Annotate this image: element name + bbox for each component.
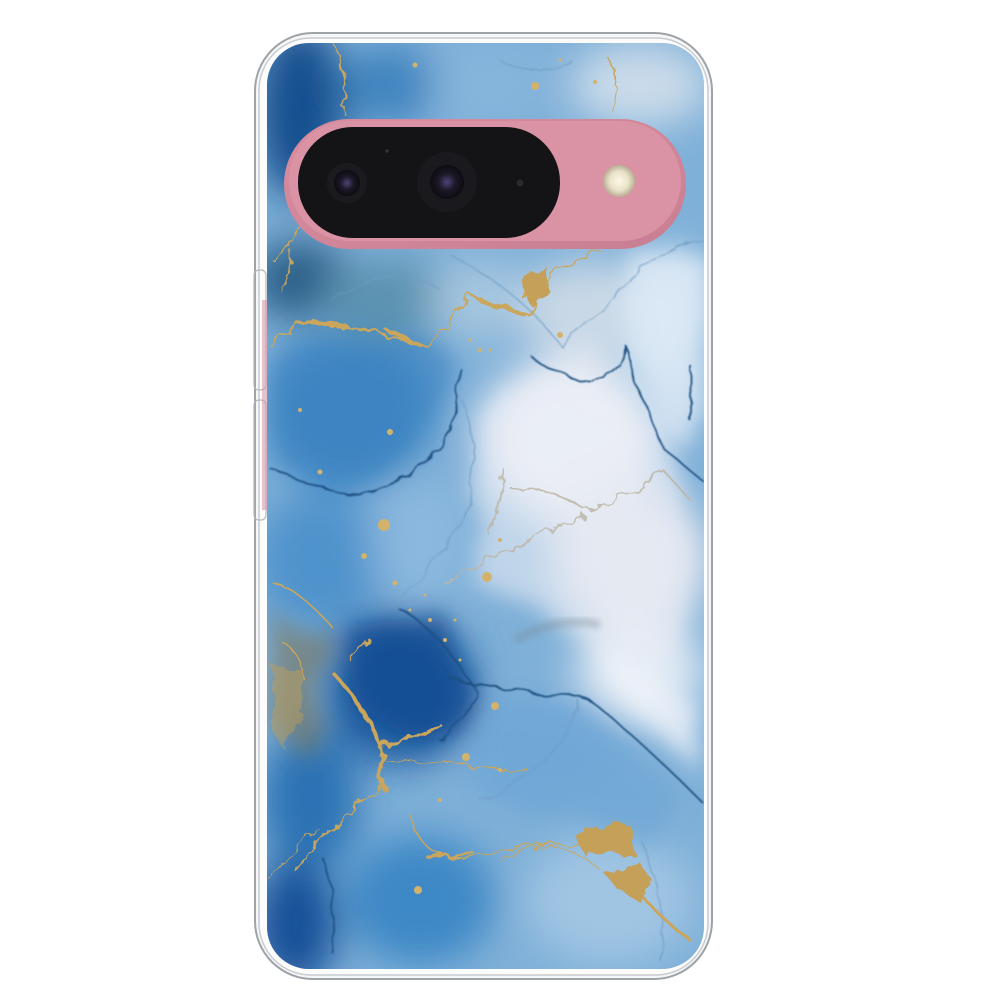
icon: sensor dots (385, 149, 524, 186)
soft colour fields (250, 20, 710, 990)
black lens window (298, 127, 560, 238)
side buttons on case (254, 270, 267, 520)
dark and light washes (270, 250, 700, 840)
icon: flash (603, 165, 635, 197)
clear case shell (255, 33, 712, 979)
gold veins (270, 45, 690, 940)
phone case product illustration (253, 32, 713, 980)
camera bar (284, 119, 686, 249)
icon: main camera lens (417, 152, 477, 212)
icon: left camera lens (327, 163, 367, 203)
gold splatter (298, 58, 597, 894)
gold patches (272, 265, 652, 902)
ink edges (272, 60, 702, 960)
grey veins (445, 470, 690, 585)
pink camera bar housing (284, 119, 686, 249)
grey smear (515, 622, 600, 640)
marble artwork (250, 20, 710, 990)
